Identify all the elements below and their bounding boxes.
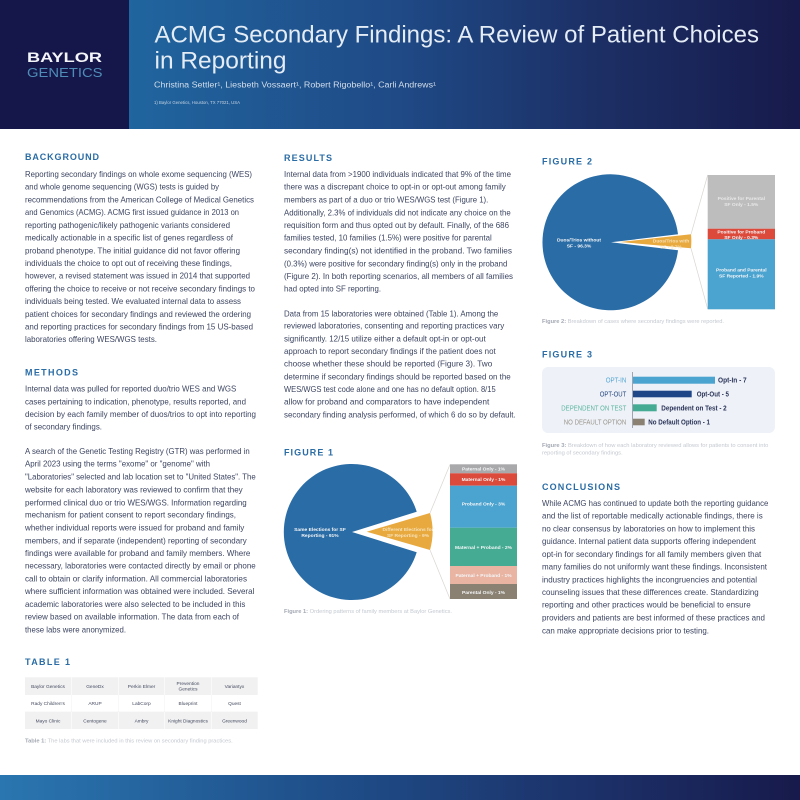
text block: results: significantly. 12/15 utilize either a default opt-in or opt-out [284,333,486,343]
text block: results: requisition form and thus opted out by default. Finally, of the 686 [284,220,509,230]
chart: figure 2 pie with breakout stack: Positive for Proband [717,230,765,236]
heading: figure 1: FIGURE 1 [284,448,333,458]
bar: dependent on test: Dependent on Test - 2 [661,405,727,412]
text block: background: individuals the choice to opt out of receiving these findings, [25,258,232,268]
chart: figure 1 pie with breakout stack: SF Reporting - 9% [387,533,430,539]
text block: results: had opted into SF reporting. [284,284,381,294]
text block: methods: "Laboratories" selected and lab location set to "United States". The [25,472,256,482]
bar: dependent on test [561,404,727,412]
chart: figure 2 pie with breakout stack: SF Only - 1.5% [724,202,759,208]
bar: opt-in: OPT-IN [606,378,626,384]
text block: conclusions: counseling issues that these differences create. Standardizing [542,587,759,597]
text block: conclusions: no clear consensus by laboratories on how to implement this [542,523,755,533]
caption: figure 1: Figure 1: Ordering patterns of family members at Baylor Genetics. [284,609,452,615]
text block: background [25,169,255,344]
title: ACMG Secondary Findings: A Review of Patient Choices [154,21,759,48]
text block: results: secondary finding analysis performed, of which 6 do so by default. [284,410,516,420]
text block: methods: review based on available information. The data from each of [25,612,240,622]
text block: methods: academic laboratories were also selected to be included in this [25,599,245,609]
bar: no default option [564,419,710,426]
table of laboratories: Greenwood [222,718,247,724]
chart: figure 1 pie with breakout stack: Paternal Only - 1% [462,466,506,472]
text block: conclusions: While ACMG has continued to update both the reporting guidance [542,498,769,508]
pie slice: same elections 91% [284,464,417,600]
table of laboratories: Variantyx [225,684,245,690]
text block: background: and reporting practices for secondary findings from 15 US-based [25,322,253,332]
chart: figure 2 pie with breakout stack: Proband and Parental [716,268,767,274]
chart: figure 1 pie with breakout stack: Maternal Only - 1% [462,477,506,483]
chart: figure 1 pie with breakout stack: Parental Only - 1% [462,590,506,596]
text block: methods: A search of the Genetic Testing Registry (GTR) was performed in [25,446,250,456]
pie slice: duos/trios without SF [542,174,678,310]
logo wordmark: GENETICS [27,65,103,80]
heading: conclusions: CONCLUSIONS [542,482,620,492]
header banner [129,0,800,129]
text block: results: allow for proband and comparators to have independent [284,397,490,407]
logo wordmark: BAYLOR [27,49,102,65]
text block: results: (Figure 2). In both reporting scenarios, all members of all families [284,271,513,281]
text block: methods: call to obtain or clarify information. All commercial laboratories [25,573,247,583]
title [154,21,759,74]
table of laboratories: ARUP [88,701,102,707]
bar: opt-out: Opt-Out - 5 [697,392,729,398]
chart: figure 1 pie with breakout stack: Reporting - 91% [301,533,339,539]
text block: conclusions: and the list of reportable medically actionable findings, there is [542,511,763,521]
text block: results: families tested, 10 families (1.5%) were positive for parental [284,233,492,243]
chart: figure 2 pie with breakout stack: SF - 96.3% [567,244,592,250]
bar: no default option: No Default Option - 1 [648,420,710,426]
logo wordmark [27,49,103,80]
text block: methods: decision by each family member of duos/trios to opt into reporting [25,409,256,419]
text block: results: determine if secondary findings should be reported based on the [284,372,511,382]
heading: methods: METHODS [25,368,78,378]
text block: methods: Internal data was pulled for reported duo/trio WES and WGS [25,384,237,394]
text block: background: offering the choice to receive or not receive secondary findings to [25,283,255,293]
heading: table 1: TABLE 1 [25,657,70,667]
text block: results: WES/WGS test code alone and one has no default option. 8/15 [284,384,496,394]
chart: figure 2 pie with breakout stack: Duos/Trios without [557,238,601,244]
stacked breakout bar [450,464,517,599]
text block: results: Internal data from >1900 individuals indicated that 9% of the time [284,169,511,179]
chart: figure 2 pie with breakout stack: Duos/Trios with [653,238,689,244]
text block: methods: mechanism for patient consent to report secondary findings, [25,510,236,520]
text block: background: proband phenotype. The initial guidance did not favor offering [25,245,240,255]
chart: figure 1 pie with breakout stack: Same Elections for SF [294,527,346,533]
text block: conclusions: guidance. Internal patient data supports offering independent [542,536,757,546]
text block: methods: cases pertaining to indication, phenotype, results reported, and [25,396,246,406]
text block: results: there was a discrepant choice to opt-in or opt-out among family [284,182,506,192]
text block: background: and whole genome sequencing (WGS) tests is guided by [25,182,220,192]
text block: conclusions: can make appropriate decisions prior to testing. [542,625,709,635]
logo panel [0,0,129,129]
heading: background: BACKGROUND [25,152,100,162]
chart: figure 1 pie with breakout stack [284,464,517,600]
text block: methods: these labs were anonymized. [25,624,126,634]
chart: figure 1 pie with breakout stack: Maternal + Proband - 2% [455,545,513,551]
text block: methods: April 2023 using the terms "exome" or "genome" with [25,459,210,469]
caption: figure 3 [542,443,768,456]
text block: results: Additionally, 2.3% of individuals did not indicate any choice on the [284,207,511,217]
text block: results: Data from 15 laboratories were obtained (Table 1). Among the [284,308,499,318]
text block: methods: findings were available for proband and family members. Where [25,548,251,558]
text block: results: members as part of a duo or trio WES/WGS test (Figure 1). [284,195,488,205]
text block: methods: where sufficient information was obtained were included. Several [24,586,254,596]
text block: background: recommendations from the American College of Medical Genetics [25,194,254,204]
stacked breakout bar [708,175,775,309]
text block: methods: website for each laboratory was reviewed to confirm that they [24,484,243,494]
table of laboratories: LabCorp [132,701,151,707]
text block: methods: of secondary findings. [25,422,102,432]
text block: results [284,169,516,420]
table of laboratories: Mayo Clinic [36,718,61,724]
pie slice: duos/trios with SF [620,234,691,248]
text block: conclusions: reporting and other practices would be beneficial to ensure [542,600,751,610]
bar: opt-out: OPT-OUT [600,392,627,398]
heading: results: RESULTS [284,153,332,163]
bar: opt-out [600,391,729,398]
bar: opt-in [606,377,747,384]
heading: figure 3: FIGURE 3 [542,350,592,360]
bar: dependent on test: DEPENDENT ON TEST [561,405,627,412]
table of laboratories: Genetics [179,687,198,693]
text block: background: individuals being tested. We evaluated internal data to assess [25,296,241,306]
chart: figure 3 bar chart [542,367,775,433]
table of laboratories: Quest [228,701,242,707]
table of laboratories: Ambry [135,718,149,724]
text block: conclusions: many families do not uniformly want these findings. Inconsistent [542,562,768,572]
table of laboratories: GeneDx [86,684,104,690]
caption: figure 3: reporting of secondary findings. [542,450,623,456]
table of laboratories [25,677,258,729]
chart: figure 1 pie with breakout stack: Proband Only - 3% [462,502,506,508]
table of laboratories: Centogene [83,718,107,724]
text block: results: choose whether these should be reported (Figure 3). Two [284,359,493,369]
text block: results: approach to report secondary findings if the patient does not [284,346,496,356]
table of laboratories: Baylor Genetics [31,684,66,690]
text block: results: secondary finding(s) not identified in the proband. Two families [284,245,512,255]
caption: figure 2: Figure 2: Breakdown of cases where secondary findings were reported. [542,319,724,325]
text block: background: however, a revised statement was issued in 2014 that supported [25,271,250,281]
table of laboratories: Perkin Elmer [128,684,156,690]
caption: table 1: Table 1: The labs that were included in this review on secondary finding practices. [25,738,233,744]
text block: results: reviewed laboratories, consenting and reporting practices vary [284,321,505,331]
text block: methods: whether individual reports were issued for proband and family [24,523,245,533]
chart: figure 2 pie with breakout stack: SF Only - 0.3% [724,235,759,241]
text block: conclusions: opt-in for secondary findings for all family members given that [542,549,762,559]
text block: background: patient choices for secondary findings and reviewed the ordering [25,309,251,319]
table of laboratories: Prevention [177,681,200,687]
title: in Reporting [154,47,286,74]
text block: background: laboratories offering WES/WGS tests. [25,334,157,344]
connector lines [691,175,708,309]
footer band [0,775,800,800]
text block: methods: necessary, laboratories were contacted directly by email or phone [25,561,256,571]
text block: methods: performed clinical duo or trio WES/WGS. Information regarding [25,497,247,507]
affiliation: 1) Baylor Genetics, Houston, TX 77021, USA [154,100,240,105]
chart: figure 2 pie with breakout stack: Positive for Parental [718,196,766,202]
text block: conclusions: industry practices highlights the incongruencies and potential [542,574,757,584]
chart: figure 1 pie with breakout stack: Different Elections for [382,527,434,533]
text block: conclusions: providers and patients are best informed of these practices and [542,613,765,623]
connector lines [430,464,450,599]
text block: conclusions [542,498,769,635]
table of laboratories: Blueprint [179,701,198,707]
text block: methods [24,384,256,634]
bar: opt-in: Opt-In - 7 [718,378,747,384]
text block: methods: members, and if separate (independent) reporting of secondary [25,535,247,545]
pie slice: different elections 9% [367,513,433,550]
chart: figure 2 pie with breakout stack: SF Reported - 1.9% [719,274,764,280]
text block: background: and Genomics (ACMG). ACMG first issued guidance in 2013 on [25,207,239,217]
caption: figure 3: Figure 3: Breakdown of how each laboratory reviewed allows for patients to consent into [542,443,768,449]
chart: figure 2 pie with breakout stack [542,174,775,310]
text block: background: reporting pathogenic/likely pathogenic variants considered [25,220,230,230]
text block: background: Reporting secondary findings on whole exome sequencing (WES) [25,169,252,179]
table of laboratories: Rady Children's [31,701,65,707]
text block: results: (0.3%) were positive for secondary finding(s) only in the proband [284,258,508,268]
table of laboratories: Knight Diagnostics [168,718,208,724]
text block: background: medically actionable in a specific list of genes regardless of [25,232,234,242]
authors: Christina Settler¹, Liesbeth Vossaert¹, Robert Rigobello¹, Carli Andrews¹ [154,81,436,90]
chart: figure 1 pie with breakout stack: Paternal + Proband - 1% [455,573,512,579]
bar: no default option: NO DEFAULT OPTION [564,420,626,426]
heading: figure 2: FIGURE 2 [542,156,592,166]
chart: figure 2 pie with breakout stack: SF - 3.7% [660,244,683,250]
